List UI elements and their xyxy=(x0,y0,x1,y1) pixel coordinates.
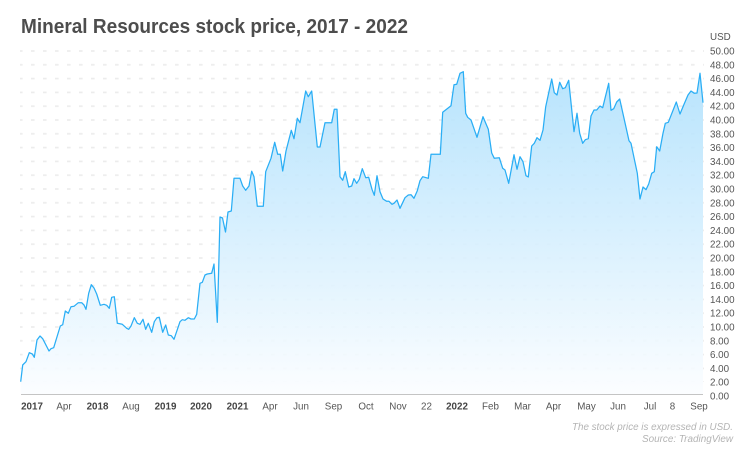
x axis labels: Jun xyxy=(610,402,626,412)
y axis labels: 42.00 xyxy=(710,102,735,113)
x axis labels: 2020 xyxy=(190,402,212,412)
x axis labels: Oct xyxy=(358,402,374,412)
y axis labels: 0.00 xyxy=(710,392,730,402)
y axis labels: 2.00 xyxy=(710,378,730,389)
x axis line xyxy=(21,394,703,396)
source note: Source: TradingView xyxy=(642,434,734,445)
x axis labels: 2019 xyxy=(155,402,177,412)
x axis labels: 2018 xyxy=(87,402,109,412)
y axis labels: 22.00 xyxy=(710,240,735,251)
y axis labels: 36.00 xyxy=(710,143,735,154)
x axis labels: May xyxy=(577,402,596,412)
y axis labels: 20.00 xyxy=(710,254,735,264)
y axis labels: 18.00 xyxy=(710,267,735,278)
source note xyxy=(572,422,734,445)
x axis labels: Apr xyxy=(262,402,278,412)
y axis labels: 30.00 xyxy=(710,184,735,196)
x axis labels: Apr xyxy=(56,402,72,412)
x axis labels: Nov xyxy=(389,402,407,412)
y axis labels: 48.00 xyxy=(710,60,735,71)
y axis labels: 40.00 xyxy=(710,116,735,126)
x axis labels: 2022 xyxy=(446,402,468,412)
y axis labels: 24.00 xyxy=(710,226,735,237)
x axis labels: Sep xyxy=(325,402,343,412)
y axis labels: 32.00 xyxy=(710,171,735,182)
y axis labels: 14.00 xyxy=(710,295,735,306)
y axis labels: 38.00 xyxy=(710,129,735,140)
y axis labels: 6.00 xyxy=(710,350,730,361)
y axis labels: 34.00 xyxy=(710,157,735,168)
x axis labels: Jun xyxy=(293,402,309,412)
x axis labels: Sep xyxy=(690,402,708,412)
source note: The stock price is expressed in USD. xyxy=(572,422,733,433)
x axis labels: Feb xyxy=(482,402,499,412)
y axis labels: 8.00 xyxy=(710,336,730,347)
x axis labels: 2021 xyxy=(227,402,249,412)
x axis labels: 22 xyxy=(421,402,432,412)
y axis labels: 16.00 xyxy=(710,281,735,292)
x axis labels: 2017 xyxy=(21,402,43,412)
grid dots xyxy=(20,50,704,382)
x axis labels: Mar xyxy=(514,402,532,412)
y axis labels: 28.00 xyxy=(710,198,735,209)
x axis labels: Jul xyxy=(644,402,656,412)
y axis labels: USD xyxy=(710,32,731,43)
y axis labels xyxy=(710,32,735,402)
y axis labels: 46.00 xyxy=(710,74,735,85)
title: Mineral Resources stock price, 2017 - 2022 xyxy=(21,15,408,38)
y axis labels: 50.00 xyxy=(710,46,735,58)
x axis labels: Apr xyxy=(546,402,562,412)
y axis labels: 26.00 xyxy=(710,212,735,223)
y axis labels: 12.00 xyxy=(710,309,735,320)
y axis labels: 10.00 xyxy=(710,322,735,334)
x axis labels xyxy=(21,402,708,412)
y axis labels: 44.00 xyxy=(710,88,735,99)
x axis labels: Aug xyxy=(122,402,140,412)
price line xyxy=(21,72,703,382)
y axis labels: 4.00 xyxy=(710,364,730,375)
area fill under price line xyxy=(21,72,703,394)
x axis labels: 8 xyxy=(670,402,676,412)
